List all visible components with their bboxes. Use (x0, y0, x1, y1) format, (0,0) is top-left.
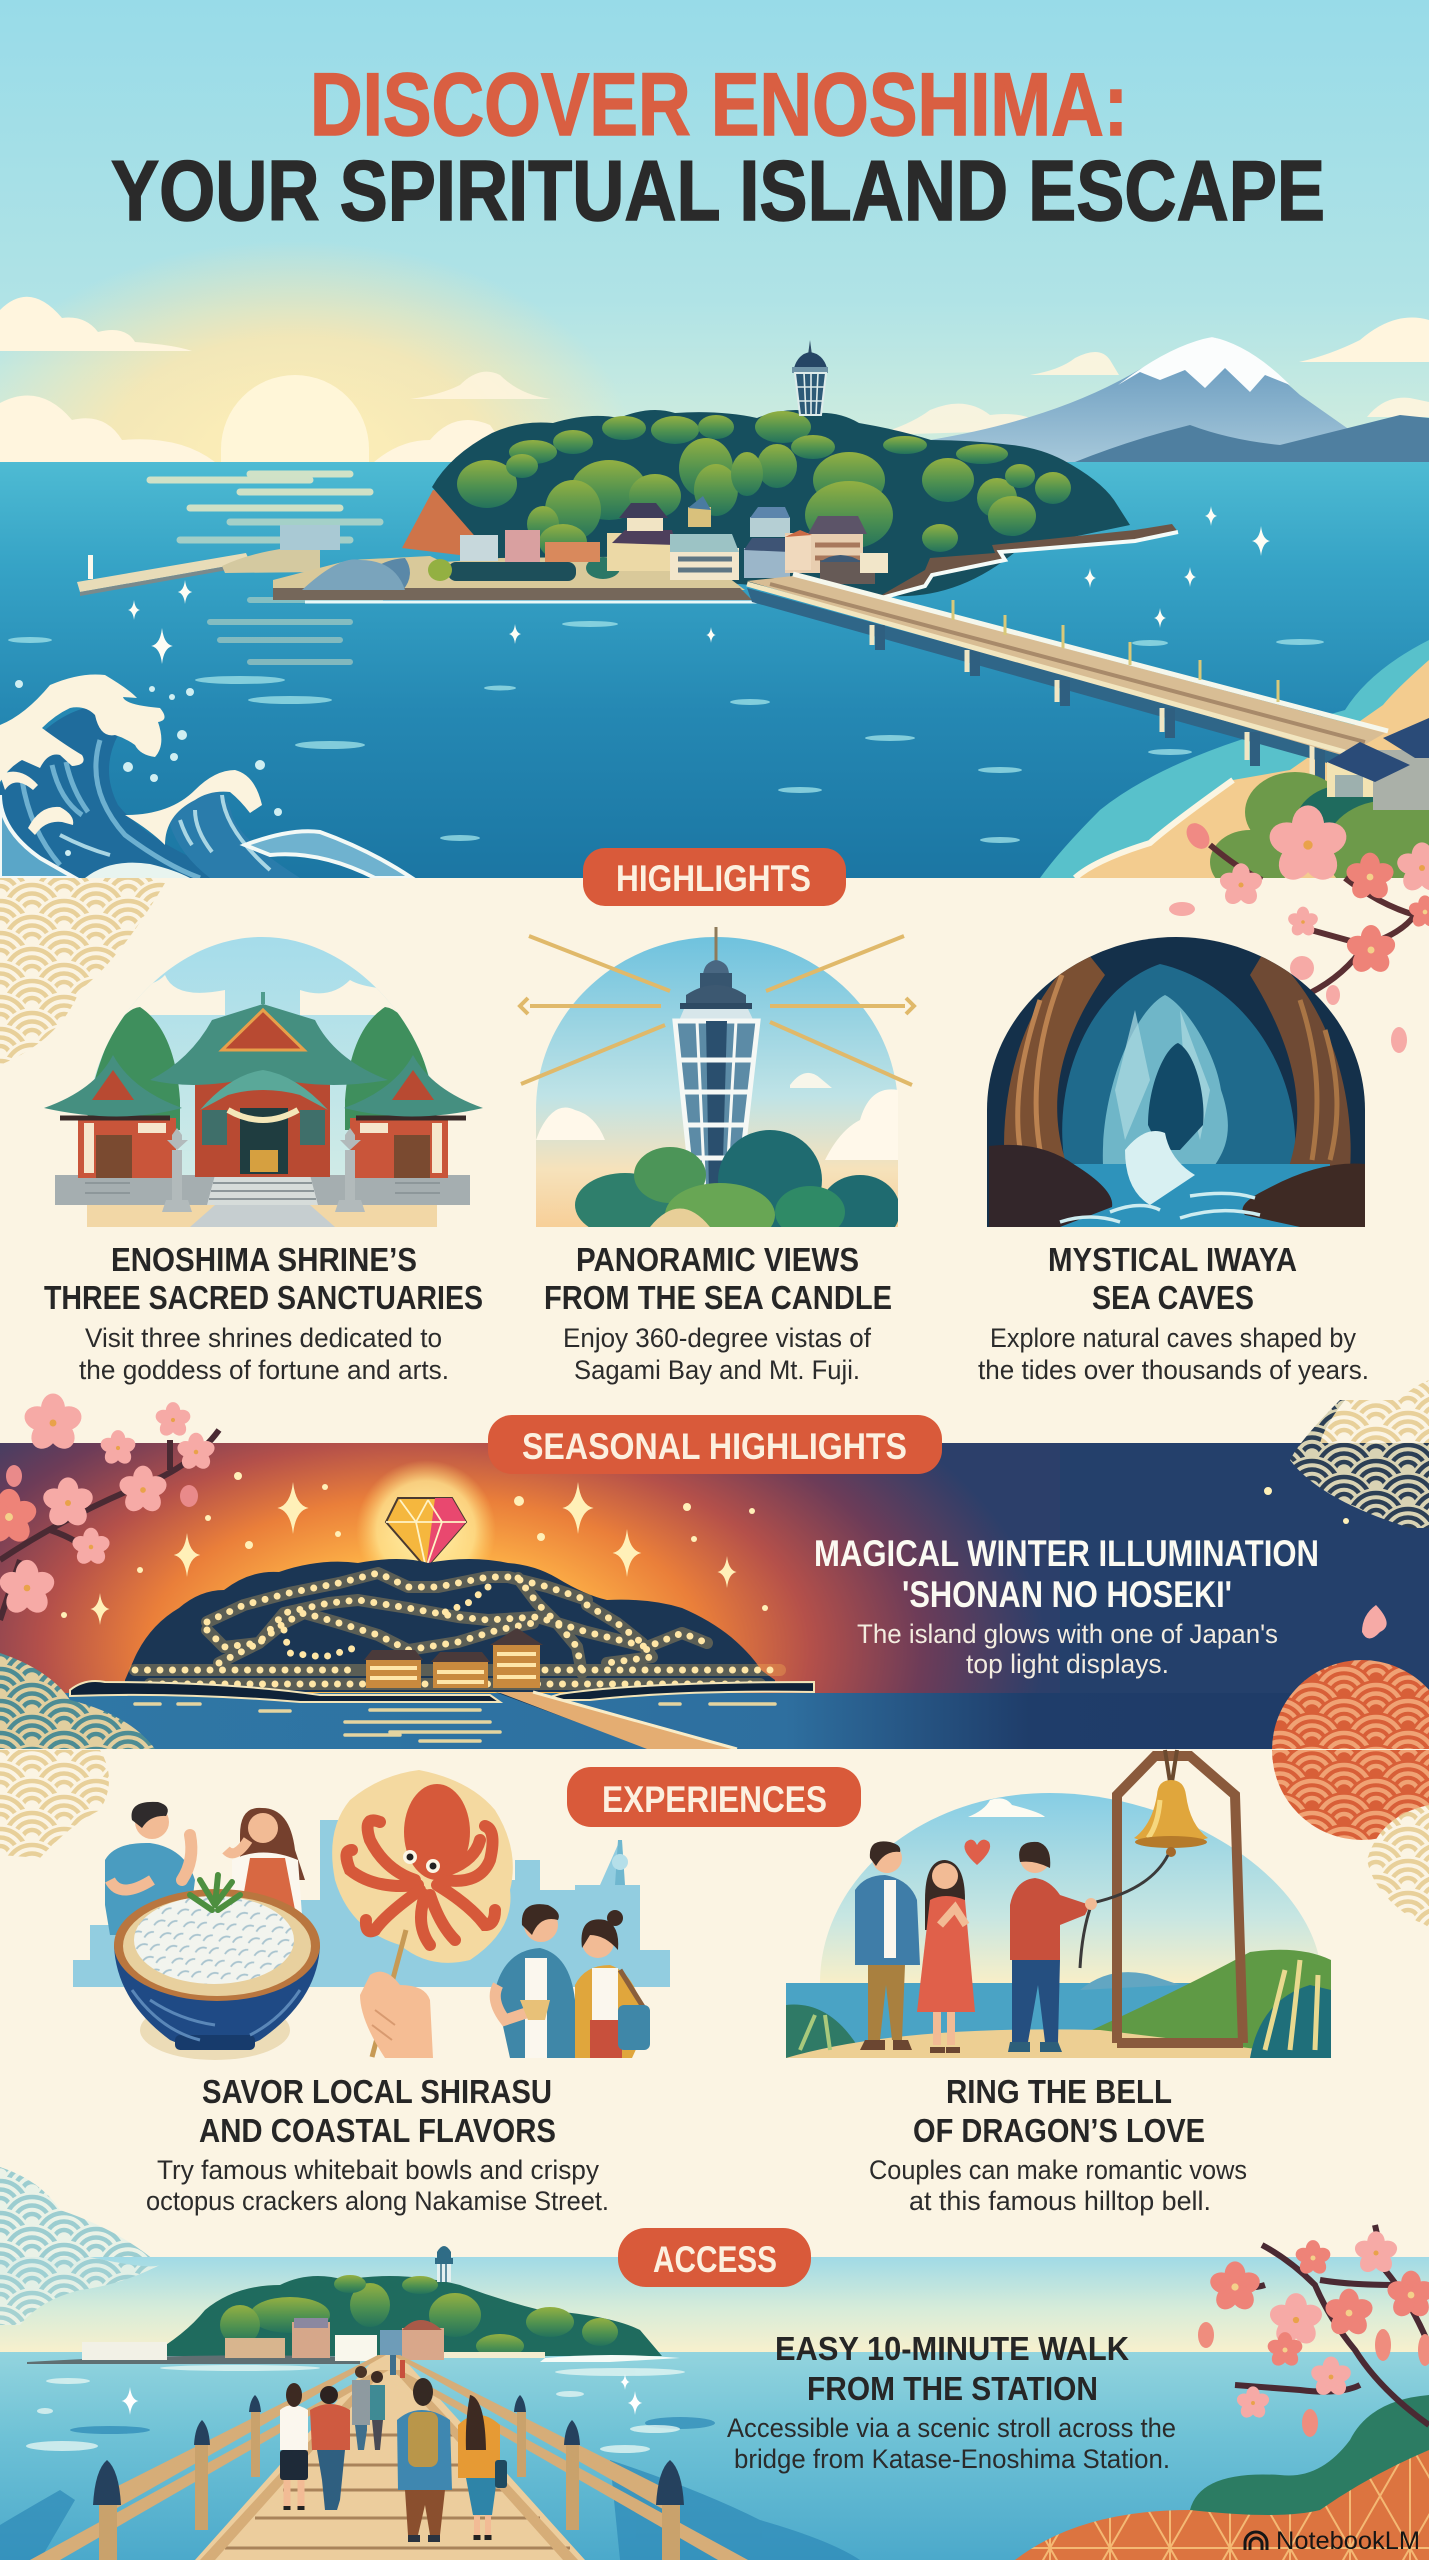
decorative seigaiha pattern: gold lower right (1376, 1380, 1429, 1445)
description (727, 2413, 1176, 2474)
title: DISCOVER ENOSHIMA: (310, 54, 1128, 154)
falling petal (1362, 1605, 1387, 1638)
decorative seigaiha: teal over the sky (0, 2257, 160, 2325)
heading (775, 2330, 1129, 2407)
woman eating (226, 1808, 305, 1915)
sea (0, 462, 1429, 878)
section pill: highlights: HIGHLIGHTS (616, 858, 811, 899)
island in the distance (27, 2275, 680, 2364)
title (111, 54, 1325, 239)
strolling couple (495, 1904, 650, 2058)
description: Explore natural caves shaped by (990, 1323, 1356, 1353)
shallow water and beach (1040, 640, 1429, 878)
description (79, 1323, 449, 1385)
description: Enjoy 360-degree vistas of (563, 1323, 871, 1353)
card: Bell of Dragon's Love (786, 1750, 1331, 2216)
woman with black skirt (280, 2383, 308, 2510)
decorative seigaiha: orange circle (1272, 1660, 1429, 1840)
sea (0, 2352, 1429, 2560)
icon: glowing jewel (386, 1498, 466, 1568)
sky background (0, 0, 1429, 462)
illuminated island (70, 1559, 814, 1749)
orange glow (0, 1443, 1060, 1693)
heading: AND COASTAL FLAVORS (199, 2112, 556, 2149)
dark water shapes (0, 2417, 860, 2560)
section pill: seasonal highlights (488, 1415, 942, 1474)
heading (1048, 1241, 1297, 1316)
breakwater (77, 525, 340, 596)
man in red (310, 2386, 350, 2510)
cherry blossom branch: upper right (1169, 805, 1429, 1053)
section pill: highlights (583, 848, 846, 906)
description: Accessible via a scenic stroll across the (727, 2413, 1176, 2443)
heading: MAGICAL WINTER ILLUMINATION (814, 1533, 1319, 1574)
heading: THREE SACRED SANCTUARIES (44, 1279, 483, 1316)
sparkles (128, 506, 1270, 664)
heading: FROM THE SEA CANDLE (544, 1279, 892, 1316)
heading: SAVOR LOCAL SHIRASU (202, 2073, 552, 2110)
decorative seigaiha: gold above the banner (1320, 1400, 1429, 1443)
cherry blossom branch: left (0, 1394, 219, 1620)
heading: SEA CAVES (1092, 1279, 1254, 1316)
section pill: seasonal highlights: SEASONAL HIGHLIGHTS (522, 1426, 907, 1467)
cream background (0, 878, 1429, 1444)
distant tower (435, 2246, 453, 2282)
description: at this famous hilltop bell. (909, 2186, 1211, 2216)
water highlights (26, 2365, 685, 2453)
heading: RING THE BELL (946, 2073, 1172, 2110)
traveller with backpack (397, 2378, 452, 2542)
heading: MYSTICAL IWAYA (1048, 1241, 1297, 1278)
man ringing bell (1008, 1842, 1097, 2052)
description: Sagami Bay and Mt. Fuji. (574, 1355, 860, 1385)
hill with asanoha pattern (1015, 2395, 1429, 2560)
heading (913, 2073, 1205, 2149)
description (978, 1323, 1369, 1385)
woman in red dress (917, 1860, 975, 2050)
clouds (0, 297, 1429, 462)
icon: Sea Candle tower illustration (520, 927, 914, 1247)
description: Visit three shrines dedicated to (85, 1323, 442, 1353)
hand holding stick (360, 1930, 433, 2058)
heading: EASY 10-MINUTE WALK (775, 2330, 1129, 2367)
decorative seigaiha: gold top left (0, 1750, 109, 1858)
man eating (105, 1802, 195, 1935)
Sea Candle lighthouse (792, 340, 828, 415)
panel: experiences (0, 1749, 1429, 2325)
heading (199, 2073, 556, 2149)
card: shirasu and crackers (73, 1770, 670, 2216)
shoreline building and hill (1210, 718, 1429, 900)
icon: cave illustration (987, 937, 1365, 1227)
sparkles and lights (61, 1472, 1349, 1625)
card: Enoshima Shrine (44, 937, 483, 1385)
NotebookLM watermark: NotebookLM (1276, 2527, 1420, 2555)
cherry blossom branch: right (1198, 2225, 1429, 2437)
sun (221, 375, 369, 462)
description: bridge from Katase-Enoshima Station. (734, 2444, 1170, 2474)
panel: seasonal highlights (0, 1394, 1429, 1840)
description: top light displays. (966, 1649, 1169, 1679)
heading: ENOSHIMA SHRINE’S (111, 1241, 417, 1278)
heading (814, 1533, 1319, 1615)
description: Couples can make romantic vows (869, 2155, 1247, 2185)
panel: hero scene (0, 0, 1429, 900)
card: Sea Candle views (520, 927, 914, 1385)
icon: food illustration (73, 1770, 670, 2060)
heading: PANORAMIC VIEWS (576, 1241, 859, 1278)
bell frame (1117, 1756, 1243, 2043)
panel: highlights (0, 805, 1429, 1445)
section pill: experiences: EXPERIENCES (602, 1779, 827, 1820)
octopus cracker (332, 1770, 513, 1963)
description: the tides over thousands of years. (978, 1355, 1369, 1385)
bell (1134, 1750, 1208, 1857)
heading (44, 1241, 483, 1316)
section pill: experiences (567, 1767, 861, 1827)
sun reflection (150, 474, 380, 662)
decorative seigaiha pattern: gold left (0, 878, 168, 1065)
decorative seigaiha: teal lower left (0, 2167, 160, 2325)
description: Try famous whitebait bowls and crispy (157, 2155, 599, 2185)
sun glow (0, 235, 700, 462)
wooden bridge (30, 2355, 748, 2560)
light reflection on water (135, 1704, 775, 1741)
description (563, 1323, 871, 1385)
decorative seigaiha: gold right (1367, 1805, 1429, 1928)
card: Iwaya Sea Caves (978, 937, 1369, 1385)
decorative orange circle continuation (1272, 1750, 1429, 1840)
woman in orange (458, 2395, 507, 2540)
description (146, 2155, 609, 2216)
water ripples (8, 621, 1324, 843)
water (0, 1693, 1429, 1749)
sky (0, 2257, 1429, 2352)
description: octopus crackers along Nakamise Street. (146, 2186, 609, 2216)
panel: access (0, 2225, 1429, 2560)
icon: shrine illustration (44, 937, 483, 1227)
heading (544, 1241, 892, 1316)
description (869, 2155, 1247, 2216)
section pill: access (618, 2228, 811, 2287)
decorative seigaiha: lower left (0, 1653, 155, 1749)
sea bridge (747, 574, 1388, 790)
cream background (0, 1749, 1429, 2257)
heading: OF DRAGON’S LOVE (913, 2112, 1205, 2149)
heading: 'SHONAN NO HOSEKI' (902, 1574, 1232, 1615)
heart (964, 1840, 990, 1865)
water sparkles (122, 2374, 642, 2415)
night banner background (0, 1443, 1429, 1749)
icon: bell scene illustration (786, 1750, 1331, 2058)
decorative seigaiha: right top (1290, 1400, 1429, 1528)
man with jacket (855, 1841, 920, 2050)
section pill: access: ACCESS (653, 2239, 777, 2280)
small far visitors (352, 2355, 405, 2450)
description: the goddess of fortune and arts. (79, 1355, 449, 1385)
description (857, 1619, 1278, 1679)
island town buildings (460, 496, 888, 584)
description: The island glows with one of Japan's (857, 1619, 1278, 1649)
heading: FROM THE STATION (807, 2370, 1098, 2407)
visitors walking (280, 2355, 507, 2542)
diamond glow (356, 1460, 496, 1600)
shirasu bowl (114, 1875, 320, 2050)
great wave (0, 674, 412, 878)
bell rope (1080, 1855, 1168, 1968)
Mount Fuji (930, 337, 1429, 462)
Enoshima island (273, 410, 1178, 602)
